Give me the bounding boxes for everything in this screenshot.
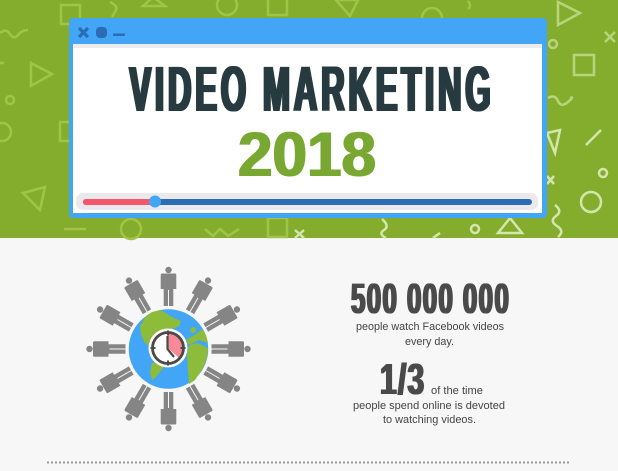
decorative shapes left [0,0,470,239]
statistic: 500 million: people watch Facebook videos [356,321,504,333]
statistic: 500 million: 500 000 000 [351,274,509,323]
statistic: one third: people spend online is devoted [353,400,505,412]
window control: maximize [96,27,107,38]
green header banner [0,0,618,239]
browser window [69,18,547,218]
year: 2018 [238,120,376,190]
clock pink sector [168,333,183,358]
window control: close [79,28,88,37]
globe with people and clock [86,267,251,431]
statistic: one third: to watching videos. [383,414,476,426]
title: VIDEO MARKETING [130,53,491,125]
continents [140,310,208,384]
clock ring and hands [150,330,186,366]
window content area [73,44,542,213]
window frame [69,18,547,218]
statistic: one third: of the time [431,385,483,397]
statistic: 500 million: every day. [405,336,454,348]
statistic: one third [353,354,505,426]
statistic: one third: 1/3 [380,354,424,403]
globe [128,308,209,390]
video progress bar [76,193,538,210]
ring of people [86,267,251,431]
decorative shapes right [548,2,615,105]
window control: minimize [113,34,125,36]
statistic: 500 million [351,274,509,348]
clock face [148,328,188,368]
